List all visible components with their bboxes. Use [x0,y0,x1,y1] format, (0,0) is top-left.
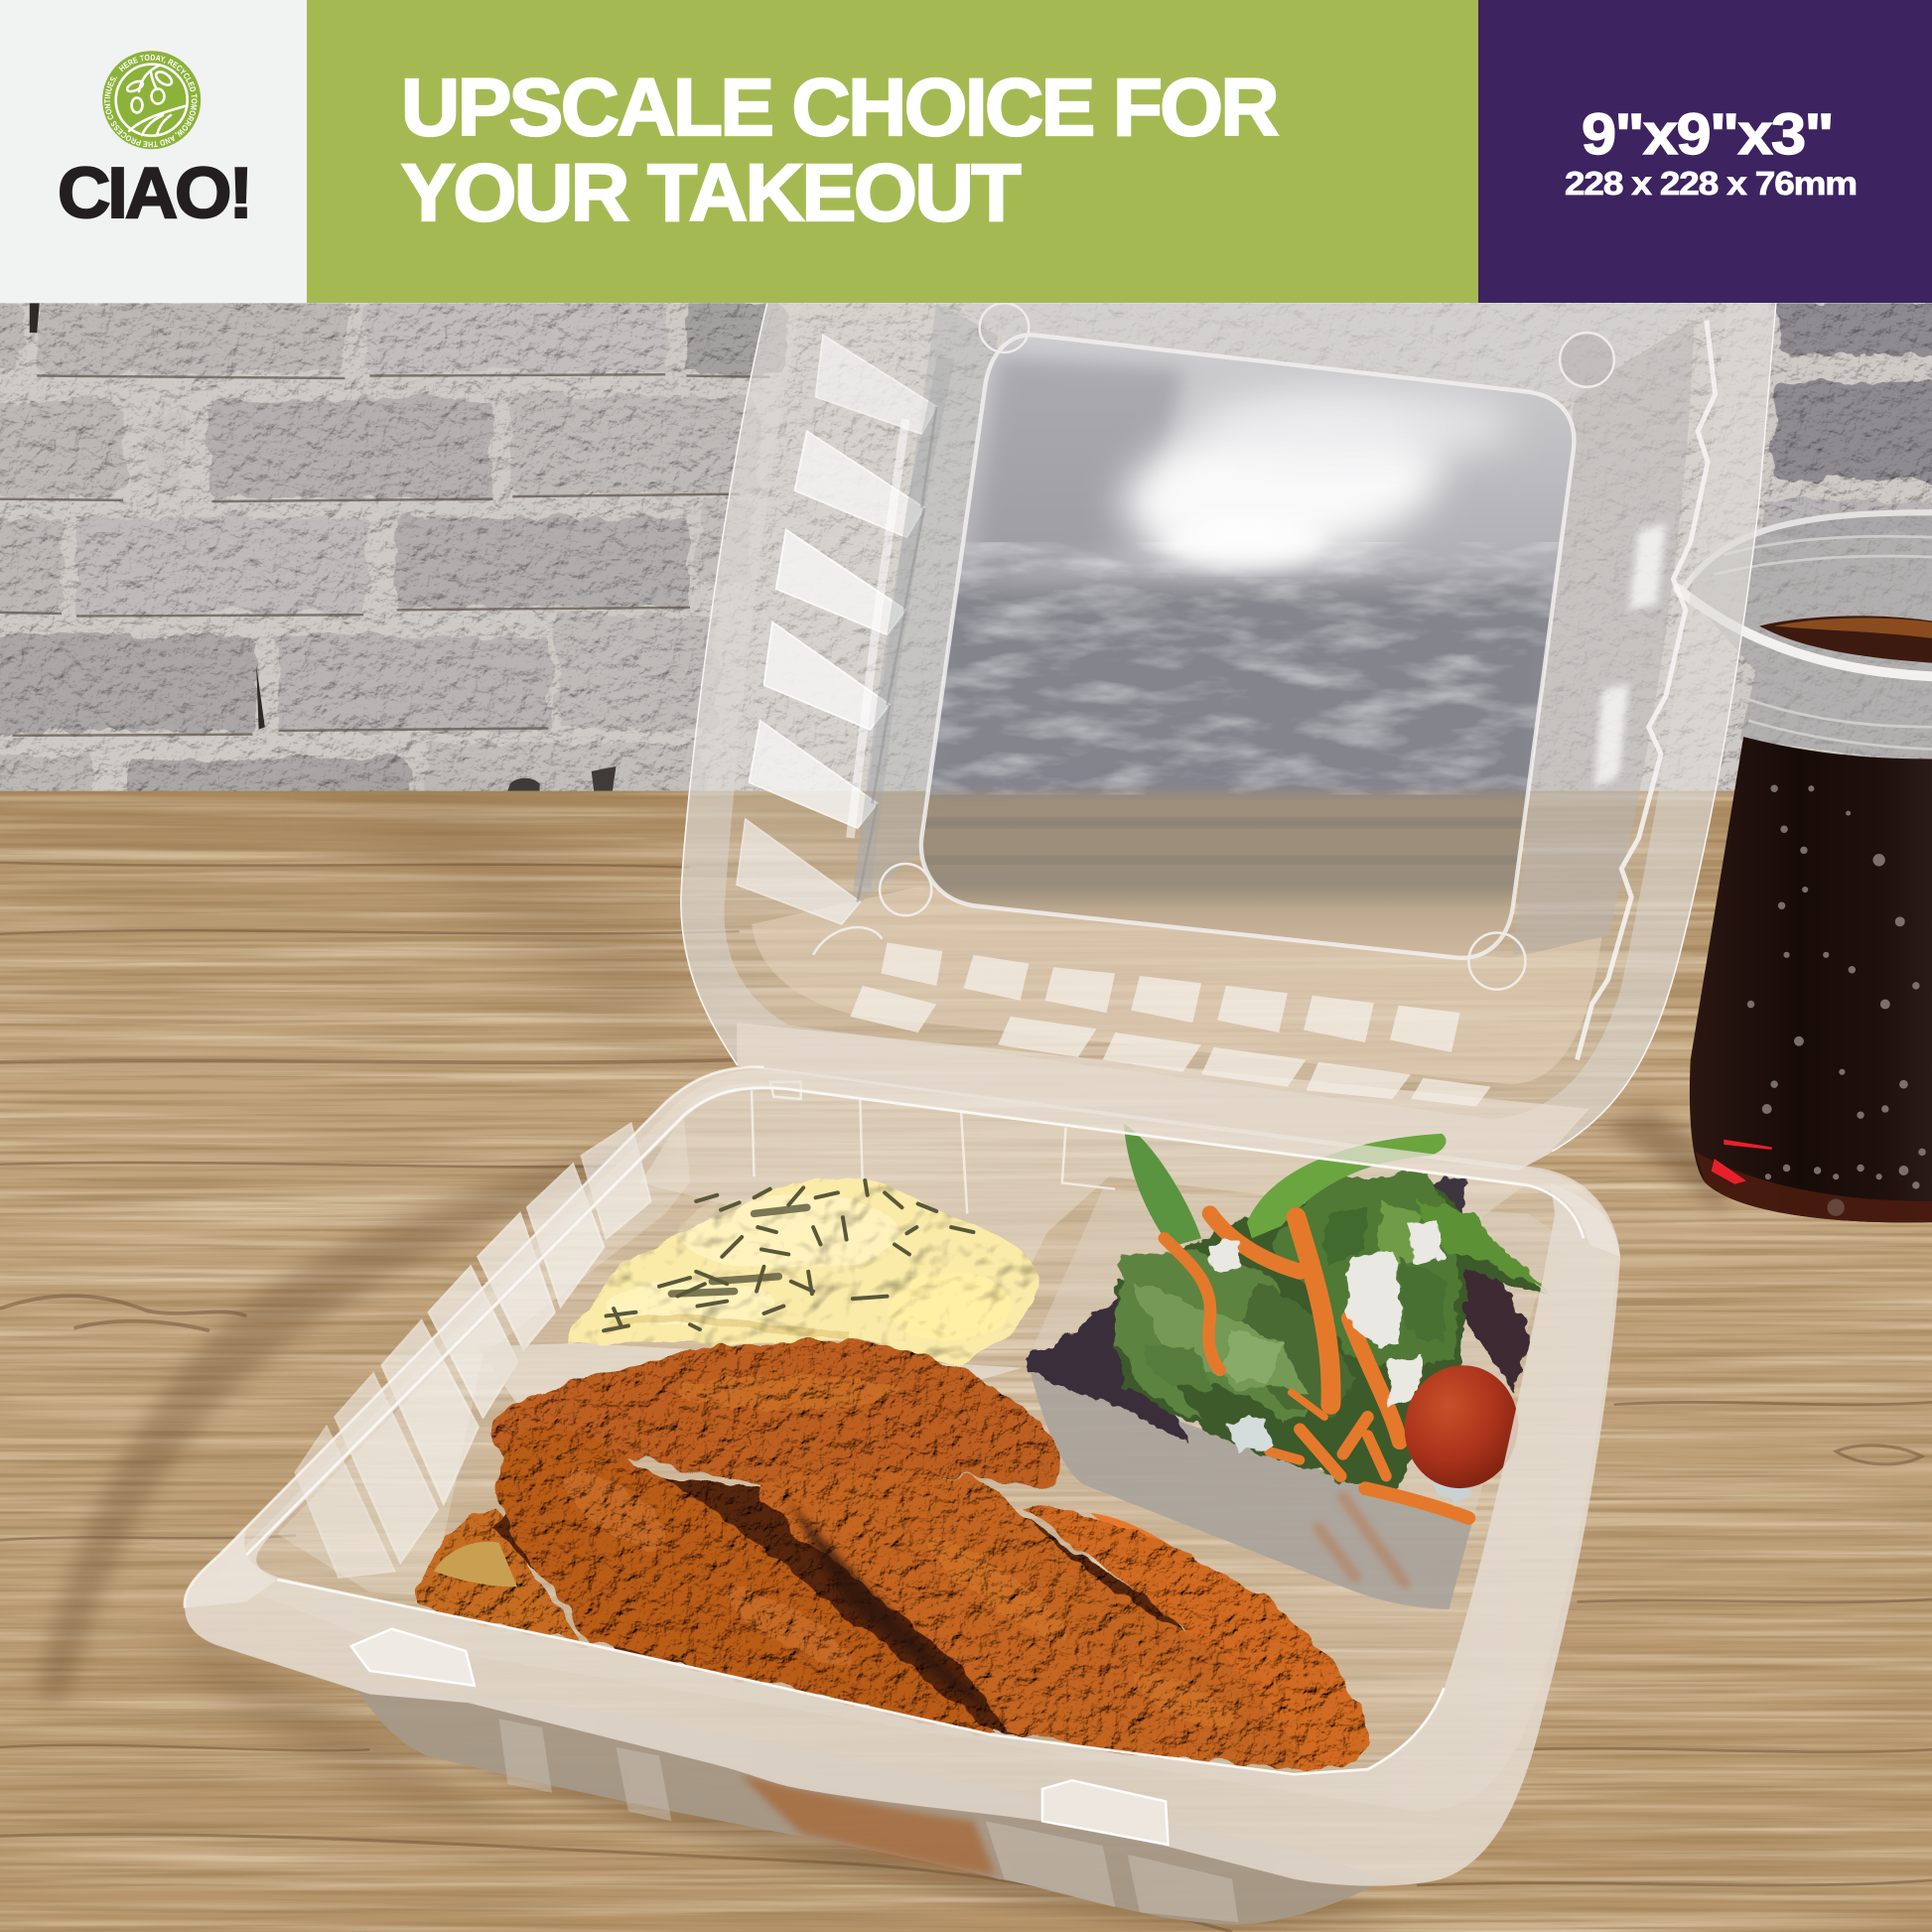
chicken tender right [761,1473,1299,1772]
logo: recycling seal: HERE TODAY, RECYCLED TOMORROW, AND THE PROCESS CONTINUES. [104,54,198,147]
lid flange [680,303,1777,1171]
tray left wall [277,1115,690,1595]
panel outline [921,335,1574,958]
mashed potatoes [569,1177,1037,1365]
wooden table [0,791,1932,1932]
lid lower trough [752,888,1601,1084]
fried chicken tenders [490,1339,1299,1772]
title panel [307,0,1478,303]
bottom ribs of lid [850,942,1491,1106]
headline: UPSCALE CHOICE FOR [401,63,1278,153]
lid translucent body [680,303,1777,1171]
salad underlay [1115,1171,1547,1497]
green leaves mass [1115,1251,1307,1442]
plastic cup with cola [1678,510,1932,1222]
tray body ribs [499,1719,1238,1922]
chicken tender top [490,1339,1060,1493]
chicken tender left [495,1427,996,1734]
brand name: CIAO! [58,154,250,233]
left and top rim [185,1067,1620,1608]
carrot behind chicken [1090,1513,1213,1580]
cola body [1690,737,1932,1222]
logo panel [0,0,307,303]
lid left channel [850,303,998,911]
lid right trough [1513,321,1694,955]
cherry tomato [1395,1356,1528,1497]
cola surface highlight [1774,618,1932,638]
food seen through tray [740,1774,996,1875]
potato wedge left [416,1506,589,1645]
herbs [604,1180,973,1330]
brick wall background [0,291,1932,808]
cola surface [1759,616,1932,663]
dimensions: 228 x 228 x 76mm [1565,165,1857,202]
tray front rim [185,1182,1620,1886]
tray left ribs [296,1124,650,1578]
right latch tab [1042,1780,1169,1845]
mash compartment divider [479,1343,1023,1405]
tray body below rim [351,1682,1386,1925]
blue cheese [1207,1220,1471,1509]
cola bubbles [1747,785,1926,1216]
cup upper clear section [1686,510,1932,763]
size panel [1478,0,1932,303]
headline: YOUR TAKEOUT [401,148,1022,238]
carrot glimpses through compartment [1318,1497,1405,1584]
lid center panel with reflection [911,333,1584,961]
tray floor and walls [215,1069,1616,1811]
dimensions [1565,102,1857,202]
shadow gaps between tenders [788,1501,996,1716]
salad [1026,1124,1553,1518]
header bar [0,0,1932,303]
tray rear wall [640,1083,1528,1282]
rim highlights [185,1067,1584,1774]
right step detail of lid [1578,321,1716,1059]
cast shadows on the table [37,794,1725,1932]
salad compartment [1031,1370,1472,1609]
potato wedge right [1023,1506,1371,1772]
left rib glass strips [850,357,946,901]
carrots [1165,1213,1468,1518]
cola reddish base [1696,1152,1932,1222]
left ribs of lid [737,336,936,924]
left latch tab [351,1629,475,1686]
cup rim [1678,512,1932,750]
dimensions: 9"x9"x3" [1582,102,1833,167]
lid corner dimples [813,303,1614,990]
right highlights of lid [1594,523,1666,788]
dark leaves [1026,1171,1553,1497]
potato flesh left [434,1542,517,1587]
headline [401,63,1278,238]
stem leaves [1124,1124,1201,1247]
open lid of clamshell [680,303,1777,1176]
lower tray of clamshell [185,1067,1620,1925]
salad compartment upper wall [1031,1189,1555,1522]
cola red glints [1713,1141,1772,1182]
lid hinge zone [737,1023,1589,1176]
lid outer edge highlight [680,303,1777,1152]
rear wall ribs [752,1082,1115,1213]
chicken shading [553,1375,1240,1739]
dark gaps underlay [492,1466,1294,1768]
